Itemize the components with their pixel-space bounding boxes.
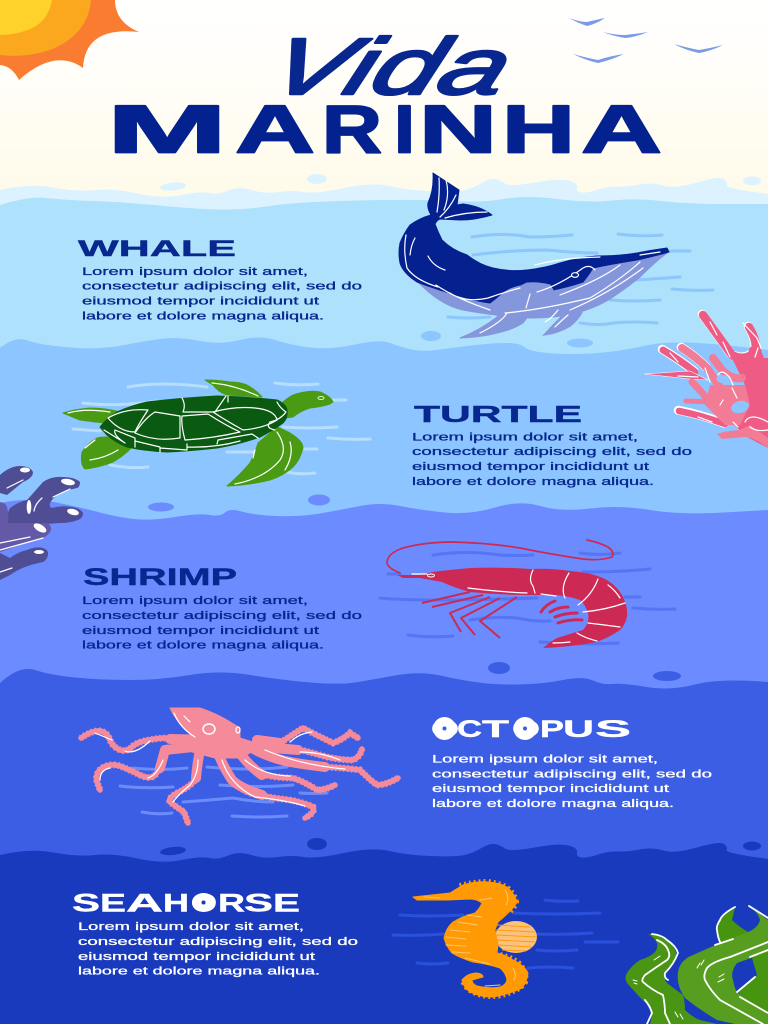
bubbles layer two [421, 331, 593, 348]
seaweed white lines [642, 906, 768, 1024]
octopus letter O dots [442, 726, 527, 730]
wave: royal blue water [0, 669, 768, 1024]
whale body and fluke [399, 173, 669, 303]
turtle section text [412, 401, 692, 488]
heading: octopus: P [540, 716, 564, 743]
title: MARINHA: A [581, 92, 662, 168]
title: MARINHA: A [235, 92, 315, 168]
title: MARINHA: I [394, 92, 415, 168]
heading: octopus: U [563, 716, 594, 743]
coral light mass [705, 385, 750, 425]
seaweed left strand [626, 934, 717, 1024]
body: seahorse: consectetur adipiscing elit, sed do [78, 936, 358, 948]
heading: octopus: T [482, 716, 510, 743]
heading: seahorse: R [218, 890, 245, 918]
body: octopus: labore et dolore magna aliqua. [432, 798, 674, 810]
sun middle ring [0, 0, 91, 56]
seahorse stripes [424, 890, 515, 986]
antenna [387, 540, 613, 573]
title: MARINHA: R [322, 92, 382, 168]
body: turtle: eiusmod tempor incididunt ut [412, 461, 650, 473]
seaweed [626, 906, 768, 1024]
heading: octopus: O [431, 716, 459, 743]
bubbles layer five [160, 838, 761, 856]
tentacle sucker edge [81, 728, 398, 823]
title [107, 21, 662, 168]
shrimp eye [428, 574, 434, 577]
wave: periwinkle water [0, 500, 768, 1024]
sky background [0, 0, 768, 230]
turtle eye [318, 396, 324, 400]
wave: foam surface [0, 178, 768, 359]
seahorse letter O dot [202, 900, 206, 904]
heading: seahorse: S [244, 890, 273, 918]
title script: Vida: Vida [257, 21, 525, 111]
pectoral flipper [460, 283, 553, 338]
seahorse body [413, 882, 528, 997]
body: turtle: consectetur adipiscing elit, sed do [412, 446, 692, 458]
heading: shrimp: SHRIMP [83, 564, 237, 591]
octopus [81, 708, 398, 823]
body: whale: consectetur adipiscing elit, sed do [82, 280, 362, 292]
octopus section text [431, 716, 712, 810]
purple coral light trunk [0, 502, 51, 552]
body: turtle [412, 432, 692, 488]
whale ripples [448, 234, 713, 324]
seahorse [413, 882, 537, 997]
heading: octopus: S [595, 716, 631, 743]
seaweed back strand top [718, 907, 748, 945]
shrimp [387, 540, 627, 648]
wave: deep water [0, 843, 768, 1024]
shrimp section text [82, 564, 362, 652]
fin stripes [496, 925, 537, 951]
body: octopus: Lorem ipsum dolor sit amet, [432, 754, 658, 766]
title: MARINHA: N [419, 92, 497, 168]
body: seahorse: eiusmod tempor incididunt ut [78, 951, 316, 963]
body: whale: labore et dolore magna aliqua. [82, 310, 324, 322]
shell pattern [104, 396, 286, 452]
swimmerets [541, 601, 582, 623]
heading: turtle: TURTLE [414, 401, 582, 427]
body: octopus: eiusmod tempor incididunt ut [432, 783, 670, 795]
body: seahorse: labore et dolore magna aliqua. [78, 966, 320, 978]
heading: seahorse: E [100, 890, 126, 918]
heading: whale: WHALE [78, 236, 236, 261]
bubbles layer four [488, 662, 681, 681]
body: seahorse [78, 921, 358, 978]
body: turtle: Lorem ipsum dolor sit amet, [412, 432, 638, 444]
whale white details [405, 178, 660, 333]
coral main mass [732, 358, 768, 448]
octopus ripples [120, 767, 327, 817]
body: whale: Lorem ipsum dolor sit amet, [82, 266, 308, 278]
whale belly [418, 253, 667, 318]
heading: octopus: C [457, 716, 482, 743]
coral deep branches [663, 315, 768, 424]
body: shrimp: consectetur adipiscing elit, sed do [82, 610, 362, 622]
sun core [0, 0, 52, 35]
big eye [203, 724, 215, 734]
heading: seahorse: H [163, 890, 189, 918]
turtle shell [100, 396, 287, 452]
coral bottom branch [717, 425, 768, 448]
wave: light blue water [0, 338, 768, 1024]
seahorse section text [72, 890, 358, 978]
tentacle bases [160, 739, 325, 795]
body: whale [82, 266, 362, 322]
turtle [63, 380, 333, 486]
heading: seahorse: E [273, 890, 300, 918]
body: shrimp [82, 595, 362, 652]
sun rays [0, 0, 139, 80]
whale eye [572, 273, 578, 277]
sun [0, 0, 139, 80]
heading: octopus: O [512, 716, 540, 743]
foam bubbles [160, 174, 761, 192]
heading: seahorse: A [126, 890, 163, 918]
shrimp ripples [380, 552, 675, 644]
whale [399, 173, 669, 338]
octopus letter O discs [433, 717, 536, 740]
body: seahorse: Lorem ipsum dolor sit amet, [78, 921, 304, 933]
coral light branches [682, 348, 742, 405]
dorsal fin [495, 921, 537, 953]
coral holes [716, 375, 750, 415]
purple coral dark branches [0, 466, 83, 580]
birds [569, 18, 723, 63]
coral spike branch [644, 371, 708, 380]
purple coral highlights [20, 468, 80, 554]
small eye [236, 727, 240, 733]
coral white highlights [670, 322, 768, 431]
flipper white lines [68, 383, 291, 484]
bubbles layer three [148, 494, 330, 512]
octopus head and mantle [170, 708, 262, 758]
coral: purple [0, 466, 83, 580]
coral white edge [662, 314, 755, 423]
coral: pink [644, 314, 768, 448]
heading: seahorse: S [72, 890, 100, 918]
seahorse letter O disc [192, 893, 215, 912]
heading: seahorse: O [191, 890, 217, 918]
small fin [542, 312, 583, 336]
shrimp white stripes [412, 570, 625, 643]
body: turtle: labore et dolore magna aliqua. [412, 476, 654, 488]
tentacles [81, 728, 398, 823]
title: MARINHA: M [107, 92, 227, 168]
whale section text [78, 236, 362, 322]
legs [422, 592, 517, 638]
seahorse ripples [393, 900, 618, 968]
body: shrimp: labore et dolore magna aliqua. [82, 640, 324, 652]
octopus white details [95, 713, 345, 806]
body: shrimp: eiusmod tempor incididunt ut [82, 625, 320, 637]
turtle flippers and head [63, 380, 333, 486]
shrimp body [397, 568, 627, 648]
body: whale: eiusmod tempor incididunt ut [82, 296, 320, 308]
body: octopus [432, 754, 712, 810]
title: MARINHA: H [502, 92, 575, 168]
body: octopus: consectetur adipiscing elit, sed do [432, 768, 712, 780]
body: shrimp: Lorem ipsum dolor sit amet, [82, 595, 308, 607]
turtle ripples [73, 383, 370, 474]
seaweed front strand [678, 906, 768, 1024]
seaweed fleck marks [633, 956, 724, 1019]
seahorse spikes [460, 883, 524, 995]
seaweed back strand right [738, 950, 768, 1020]
